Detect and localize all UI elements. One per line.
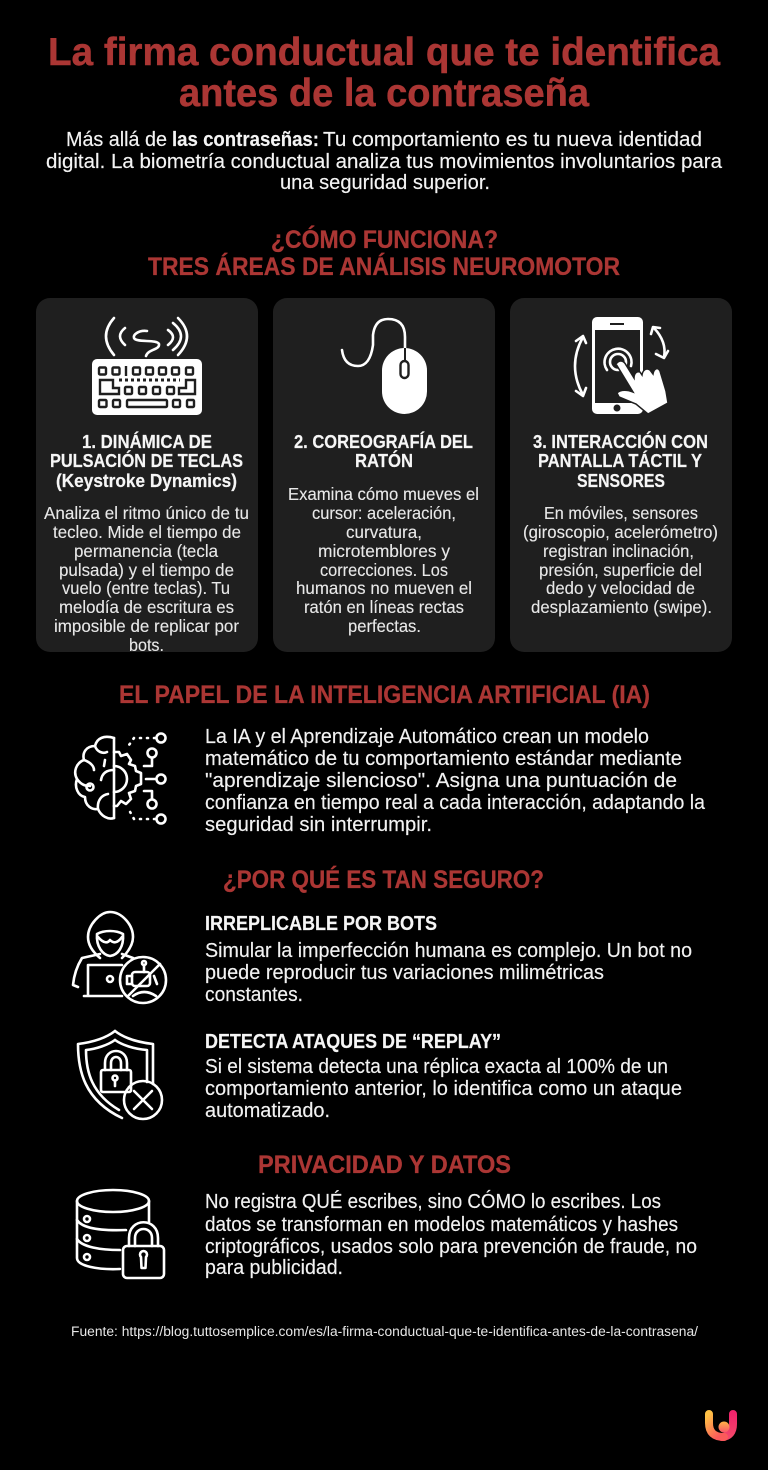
- text: irreplicable by bots: constantes.: [205, 984, 303, 1006]
- text: AI description: La IA y el Aprendizaje Automático crean un modelo: [205, 726, 649, 748]
- intro text: las contraseñas:: [172, 129, 319, 151]
- card text: desplazamiento (swipe).: [531, 597, 712, 617]
- text: irreplicable by bots: Simular la imperfección humana es complejo. Un bot no: [205, 940, 692, 962]
- text: AI description: confianza en tiempo real a cada interacción, adaptando la: [205, 792, 706, 814]
- title: La firma conductual que te identifica: [48, 31, 720, 74]
- card text: ratón en líneas rectas: [304, 597, 464, 617]
- card text: [44, 503, 249, 655]
- card text: cursor: aceleración,: [312, 503, 456, 523]
- text: replay attacks: DETECTA ATAQUES DE “REPLAY”: [205, 1031, 501, 1053]
- card text: presión, superficie del: [539, 560, 702, 580]
- text: AI description: "aprendizaje silencioso". Asigna una puntuación de: [205, 770, 677, 792]
- text: privacy description: datos se transforman en modelos matemáticos y hashes: [205, 1214, 678, 1236]
- intro text: digital. La biometría conductual analiza tus movimientos involuntarios para: [46, 151, 723, 173]
- card heading: SENSORES: [577, 471, 665, 491]
- card text: perfectas.: [348, 616, 421, 636]
- card text: humanos no mueven el: [296, 578, 472, 598]
- card heading: [294, 431, 473, 471]
- card text: pulsada) y el tiempo de: [59, 560, 234, 580]
- heading: privacy and data: PRIVACIDAD Y DATOS: [258, 1151, 511, 1179]
- card heading: [50, 431, 243, 491]
- intro text: Más allá de: [66, 129, 167, 151]
- card text: vuelo (entre teclas). Tu: [62, 578, 230, 598]
- card heading: (Keystroke Dynamics): [56, 471, 237, 491]
- card heading: [533, 431, 708, 491]
- panel: keystroke dynamics: [36, 298, 258, 655]
- icon: shield with lock: [78, 1031, 162, 1119]
- text: replay attacks: automatizado.: [205, 1100, 330, 1122]
- card text: tecleo. Mide el tiempo de: [53, 522, 241, 542]
- heading: role of AI: EL PAPEL DE LA INTELIGENCIA ARTIFICIAL (IA): [119, 681, 650, 709]
- text: replay attacks: [205, 1031, 682, 1122]
- card heading: 2. COREOGRAFÍA DEL: [294, 431, 473, 452]
- intro text: Tu comportamiento es tu nueva identidad: [323, 129, 702, 151]
- text: irreplicable by bots: IRREPLICABLE POR BOTS: [205, 913, 437, 935]
- heading: how it works: [148, 224, 620, 281]
- icon: phone with touch: [575, 317, 668, 414]
- panel: mouse choreography: [273, 298, 495, 652]
- card heading: PULSACIÓN DE TECLAS: [50, 450, 243, 471]
- icon: database with lock: [77, 1190, 164, 1278]
- heading: why so secure: ¿POR QUÉ ES TAN SEGURO?: [223, 865, 544, 894]
- title: antes de la contraseña: [179, 72, 589, 115]
- card heading: 1. DINÁMICA DE: [82, 431, 212, 452]
- source line: Fuente: https://blog.tuttosemplice.com/es/la-firma-conductual-que-te-identifica-antes-de-la-contrasena/: [71, 1324, 698, 1339]
- card text: imposible de replicar por: [54, 616, 239, 636]
- logo: [709, 1414, 733, 1437]
- card text: Analiza el ritmo único de tu: [44, 503, 249, 523]
- card text: permanencia (tecla: [74, 541, 218, 561]
- icon: keyboard: [92, 318, 202, 415]
- icon: mouse: [342, 319, 427, 414]
- card text: (giroscopio, acelerómetro): [523, 522, 718, 542]
- intro text: [46, 129, 723, 194]
- text: privacy description: criptográficos, usados solo para prevención de fraude, no: [205, 1236, 697, 1258]
- card heading: 3. INTERACCIÓN CON: [533, 431, 708, 452]
- panel: touch screen and sensors: [510, 298, 732, 652]
- card text: En móviles, sensores: [544, 503, 698, 523]
- text: privacy description: [205, 1190, 697, 1279]
- text: privacy description: para publicidad.: [205, 1257, 343, 1279]
- text: replay attacks: Si el sistema detecta una réplica exacta al 100% de un: [205, 1056, 668, 1078]
- intro text: una seguridad superior.: [280, 172, 490, 194]
- text: AI description: matemático de tu comportamiento estándar mediante: [205, 748, 682, 770]
- title: [48, 31, 720, 115]
- card text: microtemblores y: [318, 541, 450, 561]
- card heading: PANTALLA TÁCTIL Y: [538, 450, 702, 471]
- icon: hacker with crossed-out bot: [73, 912, 166, 1003]
- card text: Examina cómo mueves el: [288, 484, 479, 504]
- card text: [288, 484, 479, 636]
- card text: curvatura,: [346, 522, 422, 542]
- card text: correcciones. Los: [320, 560, 448, 580]
- card text: bots.: [129, 635, 164, 655]
- text: privacy description: No registra QUÉ escribes, sino CÓMO lo escribes. Los: [205, 1190, 661, 1213]
- card text: dedo y velocidad de: [546, 578, 695, 598]
- text: replay attacks: comportamiento anterior, lo identifica como un ataque: [205, 1078, 682, 1100]
- text: irreplicable by bots: puede reproducir tus variaciones milimétricas: [205, 962, 604, 984]
- card text: [523, 503, 718, 617]
- text: irreplicable by bots: [205, 913, 692, 1006]
- card text: registran inclinación,: [543, 541, 694, 561]
- text: AI description: [205, 726, 706, 836]
- card heading: RATÓN: [355, 450, 413, 471]
- card text: melodía de escritura es: [59, 597, 234, 617]
- heading: how it works: TRES ÁREAS DE ANÁLISIS NEUROMOTOR: [148, 252, 620, 281]
- icon: brain and circuits: [75, 734, 166, 824]
- text: AI description: seguridad sin interrumpir.: [205, 814, 432, 836]
- heading: how it works: ¿CÓMO FUNCIONA?: [271, 224, 498, 254]
